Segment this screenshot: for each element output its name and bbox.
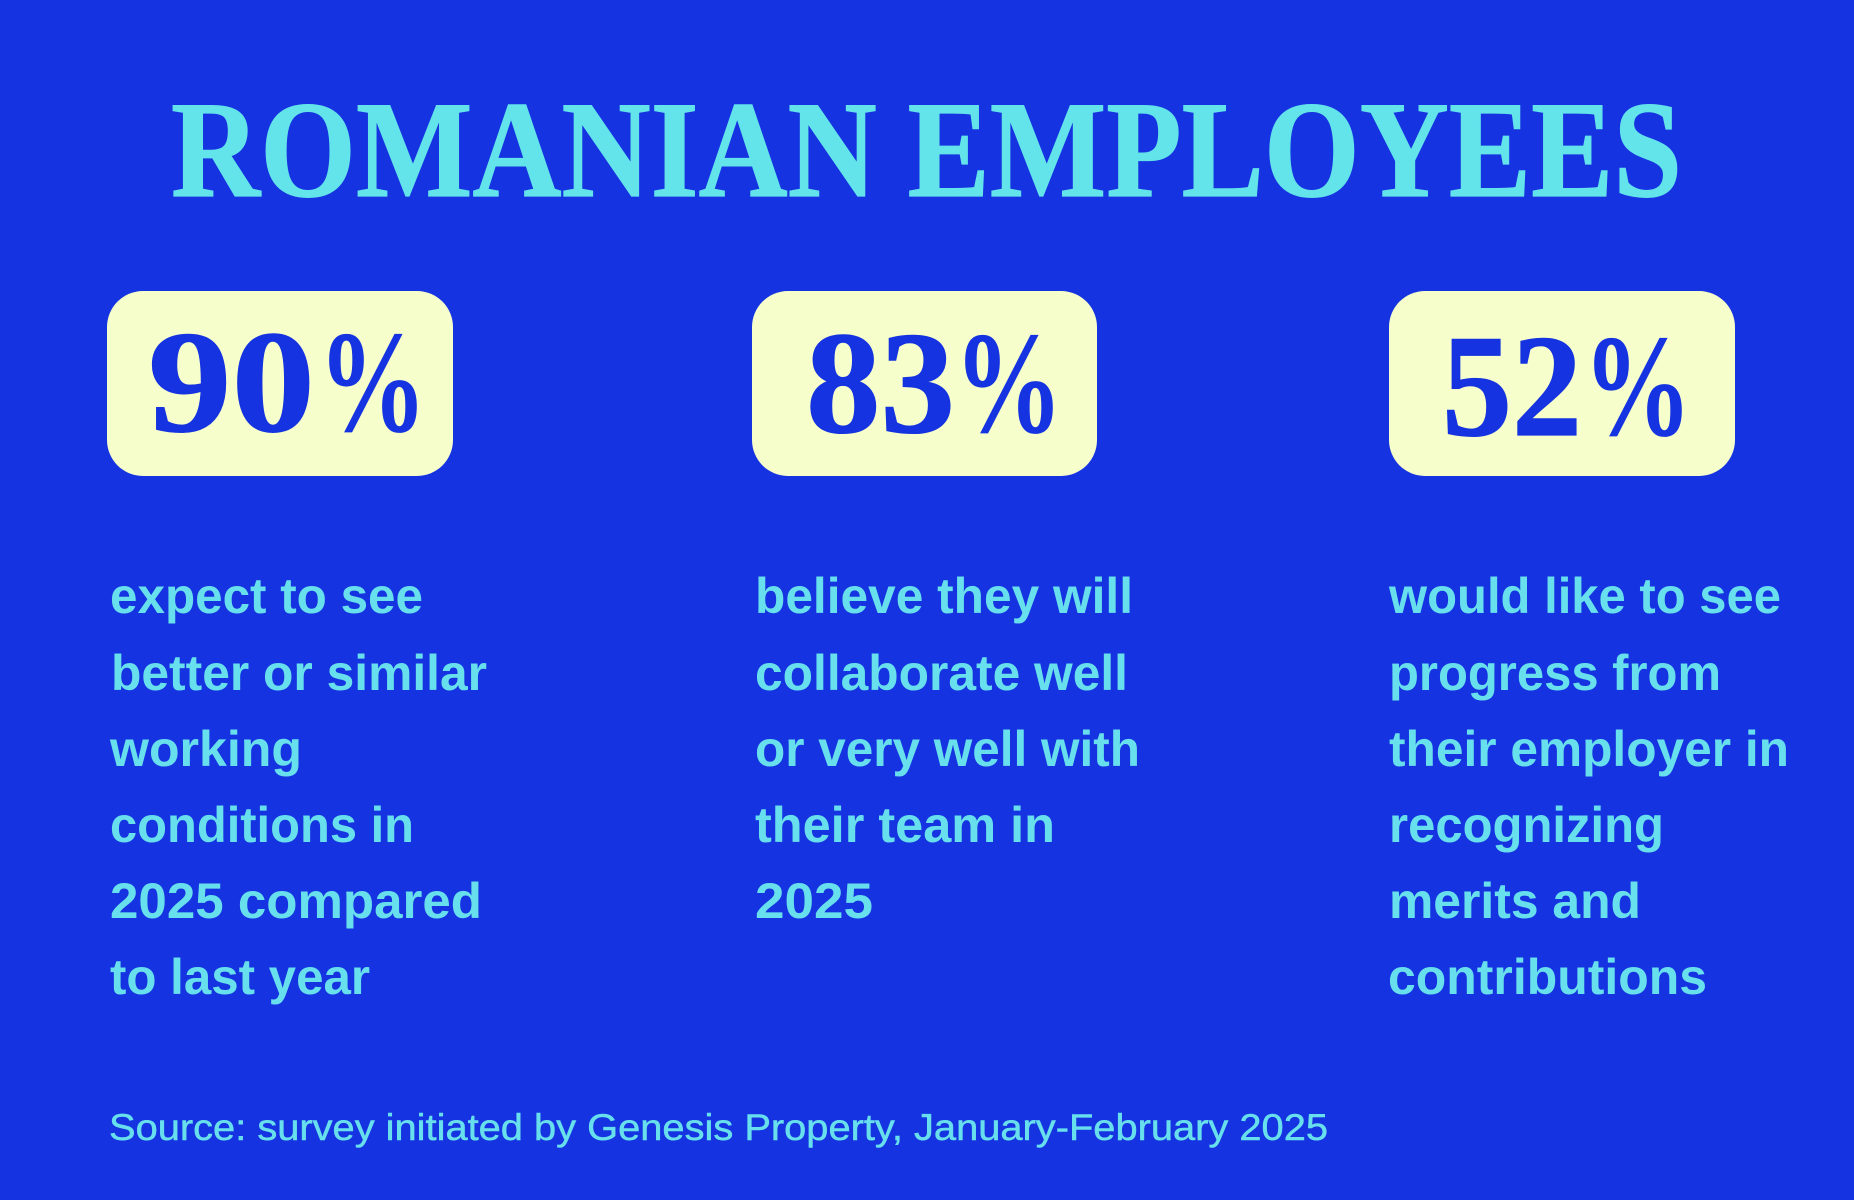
text block: 90% description: 2025 compared xyxy=(110,873,482,929)
text block: 52% description xyxy=(1388,568,1789,1005)
text block: 83% description: collaborate well xyxy=(755,645,1128,701)
text block: 52% description: progress from xyxy=(1389,645,1721,701)
text block: 90% description: expect to see xyxy=(110,568,423,624)
source note: Source: survey initiated by Genesis Property, January-February 2025 xyxy=(109,1107,1328,1148)
text block: 83% description: believe they will xyxy=(755,568,1133,624)
stat badge: 83% xyxy=(752,291,1097,476)
text block: 52% description: would like to see xyxy=(1388,568,1781,624)
text block: 90% description xyxy=(109,568,487,1005)
title: ROMANIAN EMPLOYEES xyxy=(171,73,1682,226)
text block: 52% description: their employer in xyxy=(1389,721,1789,777)
text block: 90% description: working xyxy=(109,721,302,777)
stat badge: 90% xyxy=(107,291,453,476)
text block: 90% description: conditions in xyxy=(110,797,414,853)
stat badge: 90%: 90 xyxy=(148,301,315,463)
panel: 83% statistic xyxy=(752,291,1140,929)
text block: 52% description: recognizing xyxy=(1389,797,1664,853)
text block: 83% description: or very well with xyxy=(755,721,1140,777)
stat badge: 83%: 83 xyxy=(806,302,955,464)
text block: 83% description: their team in xyxy=(755,797,1055,853)
stat badge: 90%: % xyxy=(318,301,427,463)
text block: 90% description: to last year xyxy=(110,949,370,1005)
text block: 90% description: better or similar xyxy=(111,645,487,701)
text block: 83% description xyxy=(755,568,1140,929)
text block: 83% description: 2025 xyxy=(755,873,873,929)
stat badge: 52% xyxy=(1389,291,1735,476)
stat badge: 52%: % xyxy=(1583,305,1692,467)
text block: 52% description: contributions xyxy=(1388,949,1707,1005)
text block: 52% description: merits and xyxy=(1389,873,1641,929)
panel: 90% statistic xyxy=(107,291,487,1005)
stat badge: 83%: % xyxy=(954,302,1063,464)
stat badge: 52%: 52 xyxy=(1442,305,1582,467)
panel: 52% statistic xyxy=(1388,291,1789,1005)
